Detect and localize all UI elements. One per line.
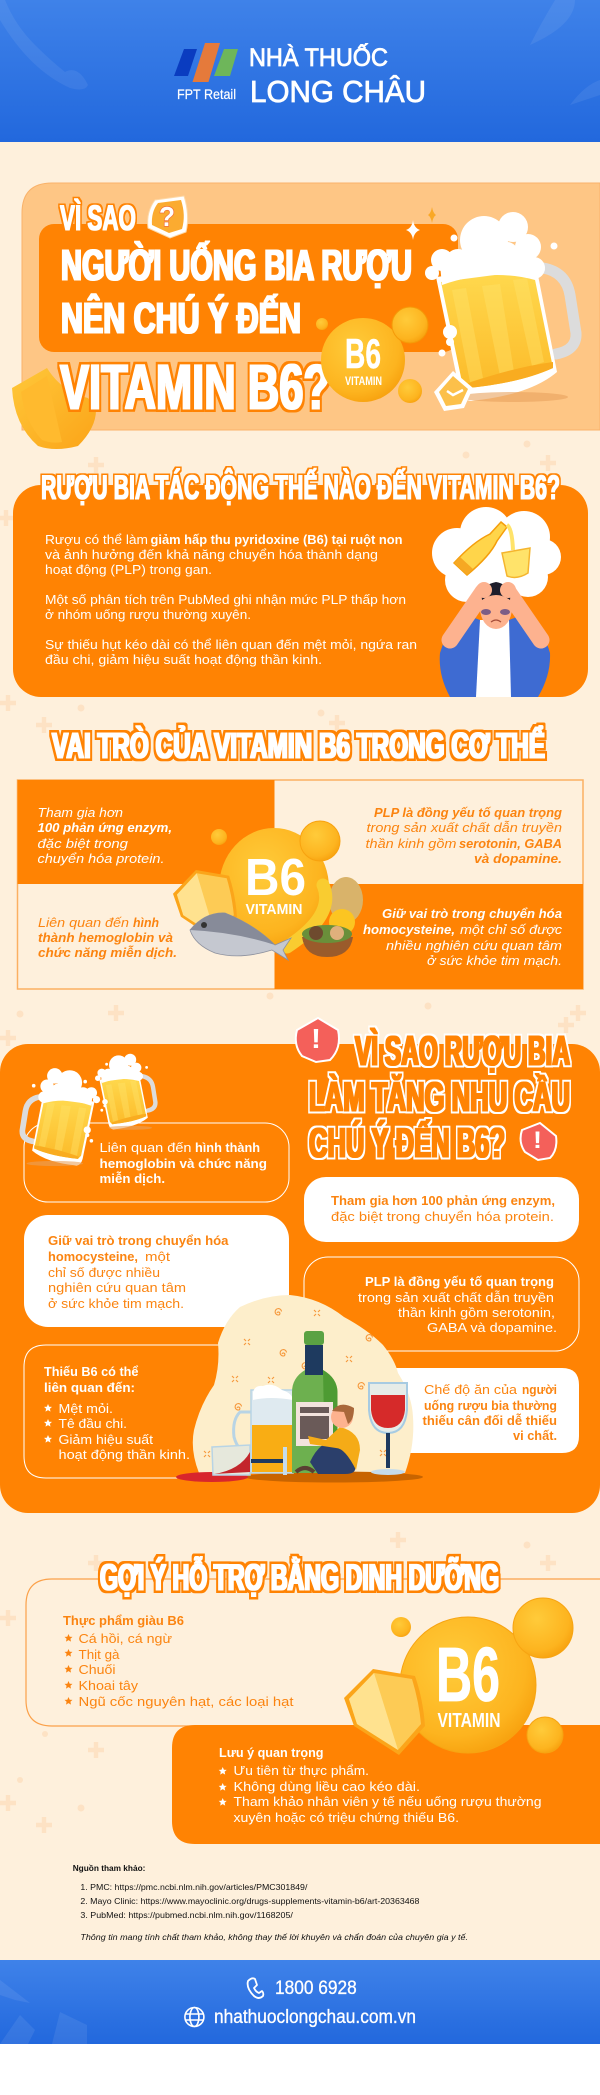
- text: role homocysteine: [363, 906, 563, 968]
- card: diet: [390, 1368, 579, 1453]
- card: PLP: [304, 1257, 579, 1351]
- text: role PLP: [366, 805, 562, 866]
- card: PLP: GABA và dopamine.: [427, 1320, 557, 1335]
- text: rich food list: Cá hồi, cá ngừ: [78, 1631, 172, 1646]
- icon: exclamation badge bottom: [521, 1123, 556, 1160]
- card: hemoglobin: miễn dịch.: [100, 1171, 165, 1186]
- text: role enzyme: đặc biệt trong: [38, 836, 129, 851]
- text: role PLP: và dopamine.: [474, 851, 562, 866]
- icon: phone: [248, 1978, 263, 1998]
- logo: FPT Retail mark: [174, 43, 238, 102]
- panel: important notes: Lưu ý quan trọng: [219, 1745, 324, 1760]
- text block: references: 3. PubMed: https://pubmed.ncbi.nlm.nih.gov/1168205/: [80, 1910, 294, 1920]
- text block: alcohol effects: [45, 532, 417, 667]
- card: diet: uống rượu bia thường: [424, 1398, 557, 1413]
- icon: exclamation badge top: !: [311, 1023, 321, 1054]
- text block: references: 2. Mayo Clinic: https://www.mayoclinic.org/drugs-supplements-vitamin-b6/art-20363468: [80, 1896, 420, 1906]
- card: PLP: thần kinh gồm serotonin,: [398, 1305, 555, 1320]
- text: rich food list: Khoai tây: [78, 1678, 139, 1693]
- text: rich food list: Thực phẩm giàu B6: [63, 1613, 184, 1628]
- icon: hero vitamin bubble: [316, 307, 428, 403]
- text: role homocysteine: Giữ vai trò trong chuyển hóa: [382, 906, 562, 921]
- card: homocysteine: một: [145, 1249, 170, 1264]
- icon: hero vitamin bubble: B6: [345, 330, 381, 377]
- text block: alcohol effects: Một số phân tích trên PubMed ghi nhận mức PLP thấp hơn: [45, 592, 406, 607]
- text: website: nhathuoclongchau.com.vn: [214, 2007, 416, 2028]
- text: role hemoglobin: [38, 915, 177, 960]
- icon: beer mug: [425, 212, 576, 402]
- icon: exclamation badge bottom: !: [533, 1127, 542, 1154]
- heading: hero title: NGƯỜI UỐNG BIA RƯỢU: [61, 239, 412, 290]
- text: role PLP: trong sản xuất chất dẫn truyền: [366, 820, 562, 835]
- text: role hemoglobin: thành hemoglobin và: [38, 930, 173, 945]
- icon: question badge: [148, 196, 188, 238]
- icon: thought cloud with bottle: [432, 507, 561, 602]
- panel: important notes: Không dùng liều cao kéo dài.: [234, 1779, 420, 1794]
- heading: hero title: NÊN CHÚ Ý ĐẾN: [61, 293, 301, 343]
- footer band: [0, 1960, 600, 2044]
- panel: alcohol effects: [13, 468, 588, 697]
- text block: alcohol effects: Rượu có thể làm: [45, 532, 148, 547]
- icon: shield: [344, 1669, 425, 1755]
- text block: alcohol effects: ở nhóm uống rượu thường xuyên.: [45, 607, 251, 622]
- icon: vitamin B6 food cluster: VITAMIN: [246, 901, 302, 918]
- text block: references: [73, 1863, 468, 1942]
- panel: why alcohol raises need: [0, 1018, 600, 1513]
- icon: vitamin B6 food cluster: B6: [245, 849, 306, 907]
- card: deficiency signs: Mệt mỏi.: [58, 1401, 113, 1416]
- text: rich food list: Ngũ cốc nguyên hạt, các loại hạt: [78, 1694, 294, 1709]
- icon: hero vitamin bubble: VITAMIN: [345, 374, 382, 388]
- panel: nutrition outline: [26, 1579, 600, 1726]
- card: enzyme: [304, 1177, 579, 1242]
- icon: large vitamin B6 bubble: [391, 1598, 573, 1753]
- panel: roles grid: [18, 780, 583, 989]
- card: deficiency signs: liên quan đến:: [44, 1380, 135, 1395]
- card: homocysteine: nghiên cứu quan tâm: [48, 1280, 186, 1295]
- panel: important notes: [172, 1725, 600, 1844]
- text: role hemoglobin: hình: [133, 915, 159, 930]
- text block: alcohol effects: đầu chi, giảm hiệu suất hoạt động thần kinh.: [45, 652, 322, 667]
- card: homocysteine: homocysteine,: [48, 1249, 138, 1264]
- card: PLP: trong sản xuất chất dẫn truyền: [358, 1290, 554, 1305]
- icon: sparkles: [406, 207, 436, 240]
- card: deficiency signs: Thiếu B6 có thể: [44, 1364, 138, 1379]
- card: deficiency signs: Giảm hiệu suất: [58, 1432, 153, 1447]
- icon: stressed man: [440, 582, 550, 697]
- card: homocysteine: ở sức khỏe tim mạch.: [48, 1296, 184, 1311]
- icon: globe: [185, 2008, 204, 2026]
- panel: hero: [12, 183, 600, 449]
- text block: references: 1. PMC: https://pmc.ncbi.nlm.nih.gov/articles/PMC301849/: [80, 1882, 308, 1892]
- text: role enzyme: 100 phản ứng enzym,: [38, 820, 172, 835]
- card: PLP: PLP là đồng yếu tố quan trọng: [365, 1274, 554, 1289]
- card: diet: vi chất.: [513, 1428, 557, 1443]
- card: homocysteine: [24, 1215, 289, 1327]
- logo: Nhà Thuốc Long Châu: LONG CHÂU: [250, 74, 426, 109]
- header band: [0, 0, 600, 142]
- icon: check badge: [434, 371, 473, 411]
- text: role homocysteine: một chỉ số được: [460, 922, 563, 937]
- text: rich food list: Thịt gà: [78, 1647, 120, 1662]
- text block: alcohol effects: hoạt động (PLP) trong gan.: [45, 562, 212, 577]
- text: role enzyme: chuyển hóa protein.: [38, 851, 164, 866]
- text: rich food list: [63, 1613, 294, 1709]
- text: role PLP: PLP là đồng yếu tố quan trọng: [374, 805, 562, 820]
- card: homocysteine: Giữ vai trò trong chuyển hóa: [48, 1233, 229, 1248]
- text block: alcohol effects: Sự thiếu hụt kéo dài có thể liên quan đến mệt mỏi, ngứa ran: [45, 637, 417, 652]
- card: diet: Chế độ ăn của: [424, 1382, 518, 1397]
- card: hemoglobin: hemoglobin và chức năng: [100, 1156, 267, 1171]
- card: deficiency signs: hoạt động thần kinh.: [58, 1447, 190, 1462]
- text: role enzyme: [38, 805, 172, 866]
- background decoration: [0, 440, 586, 1833]
- card: diet: người: [522, 1382, 557, 1397]
- card: hemoglobin: [24, 1123, 289, 1202]
- text: role homocysteine: homocysteine,: [363, 922, 455, 937]
- logo: Nhà Thuốc Long Châu: [249, 42, 426, 109]
- text block: alcohol effects: giảm hấp thu pyridoxine (B6) tại ruột non: [150, 532, 403, 547]
- heading: hero title: [60, 198, 412, 423]
- card: enzyme: đặc biệt trong chuyển hóa protein.: [331, 1209, 554, 1224]
- icon: toasting beers: [22, 1054, 155, 1166]
- icon: large vitamin B6 bubble: B6: [436, 1632, 500, 1718]
- card: diet: thiếu cân đối dễ thiếu: [422, 1413, 557, 1428]
- card: hemoglobin: Liên quan đến: [100, 1140, 192, 1155]
- text: role hemoglobin: chức năng miễn dịch.: [38, 945, 177, 960]
- card: deficiency signs: Tê đầu chi.: [58, 1416, 127, 1431]
- text: rich food list: Chuối: [78, 1662, 116, 1677]
- icon: exclamation badge top: [296, 1018, 339, 1062]
- heading: section 4 title: [309, 1027, 570, 1166]
- card: deficiency signs: [24, 1345, 240, 1478]
- text: role hemoglobin: Liên quan đến: [38, 915, 129, 930]
- text: role homocysteine: nhiều nghiên cứu quan tâm: [386, 938, 562, 953]
- text block: references: Nguồn tham khảo:: [73, 1863, 146, 1873]
- text block: alcohol effects: và ảnh hưởng đến khả năng chuyển hóa thành dạng: [45, 547, 378, 562]
- icon: hero shield: [12, 368, 96, 449]
- text: role PLP: serotonin, GABA: [459, 836, 562, 851]
- panel: important notes: xuyên hoặc có triệu chứng thiếu B6.: [234, 1810, 459, 1825]
- panel: important notes: Ưu tiên từ thực phẩm.: [234, 1763, 369, 1778]
- logo: FPT Retail mark: FPT Retail: [177, 86, 236, 102]
- logo: Nhà Thuốc Long Châu: NHÀ THUỐC: [249, 42, 388, 72]
- text: hotline: 1800 6928: [275, 1978, 357, 1999]
- icon: large vitamin B6 bubble: VITAMIN: [438, 1710, 500, 1732]
- icon: question badge: ?: [159, 201, 175, 232]
- illustration: man hugging bottle: [176, 1295, 423, 1482]
- heading: hero title: VITAMIN B6?: [60, 351, 330, 423]
- text block: references: Thông tin mang tính chất tham khảo, không thay thế lời khuyên và chẩn đoán của chuyên gia y tế.: [80, 1932, 468, 1942]
- text: role PLP: thần kinh gồm: [366, 836, 457, 851]
- card: enzyme: Tham gia hơn 100 phản ứng enzym,: [331, 1193, 555, 1208]
- text: role enzyme: Tham gia hơn: [38, 805, 123, 820]
- card: hemoglobin: hình thành: [195, 1140, 260, 1155]
- panel: important notes: Tham khảo nhân viên y tế nếu uống rượu thường: [234, 1794, 542, 1809]
- heading: hero title: VÌ SAO: [60, 198, 136, 238]
- icon: vitamin B6 food cluster: [173, 821, 363, 960]
- text: role homocysteine: ở sức khỏe tim mạch.: [427, 953, 562, 968]
- card: homocysteine: chỉ số được nhiều: [48, 1265, 160, 1280]
